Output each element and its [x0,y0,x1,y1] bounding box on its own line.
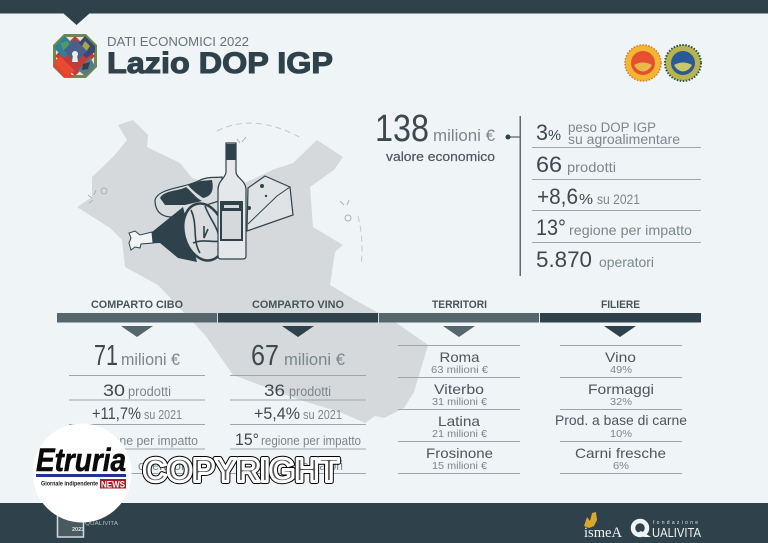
key figures list: 13° [536,215,566,240]
watermark: copyright: COPYRIGHT [143,452,339,488]
cheese [247,176,293,231]
panel: comparto vino: prodotti [289,384,331,399]
panel: filiere: 32% [610,396,632,408]
panel: territori: 21 milioni € [432,428,487,440]
ham hock [129,207,197,262]
panel: filiere [555,345,687,474]
panel: comparto cibo: milioni € [121,350,181,369]
logo: Ismea: ismeA [584,525,622,541]
panel: filiere: 10% [610,428,632,440]
panel: comparto vino: 67 [251,340,279,372]
logo: Fondazione Qualivita [633,520,702,540]
footer left mark: QUALIVITA [85,521,118,527]
panel: comparto cibo: prodotti [128,384,171,399]
panel: comparto cibo [69,340,205,474]
panel: comparto cibo: regione per impatto [92,433,198,448]
panel: comparto vino: +5,4% [254,404,300,423]
panel: filiere: Formaggi [588,381,654,397]
panel: comparto cibo: 71 [94,340,118,372]
column headers: COMPARTO VINO [252,299,344,311]
panel: territori: 31 milioni € [432,396,487,408]
watermark: copyright: COPYRIGHT [143,452,339,488]
main value: 138 milioni: milioni € [433,126,496,145]
panel: filiere: Prod. a base di carne [555,412,687,428]
subtitle: DATI ECONOMICI 2022 [107,34,249,49]
panel: territori: 15 milioni € [432,460,487,472]
key figures list: su 2021 [597,191,640,207]
bottle [218,143,246,259]
key figures list: 3 [536,120,548,145]
top bar [0,0,768,25]
key figures list: % [548,127,561,144]
panel: filiere: Vino [605,349,636,365]
key figures list: operatori [599,254,654,270]
icon: Lazio regional crest [53,34,97,78]
panel: comparto cibo: operatori [138,458,188,473]
panel: comparto vino: su 2021 [303,407,342,422]
key figures list: regione per impatto [569,222,692,238]
logo: Ismea [584,512,622,541]
key figures list: +8,6 [537,184,578,209]
panel: territori: Roma [440,349,480,365]
footer band [0,503,768,543]
key figures list: 5.870 [536,247,592,272]
main value: 138 milioni: valore economico [386,150,495,164]
watermark: Etruria News badge: Giornale indipendente [41,480,98,488]
panel: comparto cibo: +11,7% [92,404,141,423]
main value: 138 milioni: 138 [375,108,429,150]
column headers [91,299,640,311]
panel: filiere: 6% [613,460,629,472]
watermark: Etruria News badge: Etruria [36,442,126,478]
panel: comparto cibo: su 2021 [144,407,182,422]
logo: Fondazione Qualivita: fondazione [653,520,698,526]
connector line [506,116,521,276]
panel: filiere: Carni fresche [575,445,666,461]
panel: territori: Viterbo [434,381,484,397]
logo: Fondazione Qualivita: UALIVITA [652,526,702,540]
key figures list: 66 [536,152,562,177]
panel: comparto vino: 36 [264,381,285,400]
panel: territori [398,345,520,474]
panel: filiere: 49% [610,364,632,376]
steak [155,177,222,217]
column headers: TERRITORI [432,299,487,311]
icon: food products (ham, steak, wine, cheese) [129,143,293,265]
panel: territori: 63 milioni € [431,364,488,376]
footer left mark [58,515,118,537]
column bars and pointers [57,313,701,337]
map of Lazio [77,120,428,423]
panel: comparto vino [230,340,366,474]
key figures list: prodotti [567,159,616,175]
main value: 138 milioni [375,108,496,164]
footer left mark: 2023 [72,527,84,533]
panel: comparto vino: regione per impatto [261,433,361,448]
key figures list: % [579,191,593,208]
title: Lazio DOP IGP [107,47,333,80]
watermark: Etruria News badge: NEWS [101,480,125,490]
panel: comparto vino: 15° [235,430,259,449]
panel: comparto vino: operatori [295,458,343,473]
column headers: COMPARTO CIBO [91,299,183,311]
panel: territori: Latina [438,413,480,429]
panel: comparto vino: milioni € [284,350,346,369]
key figures list: peso DOP IGP [568,120,656,135]
key figures list: su agroalimentare [568,132,680,147]
key figures list [532,120,701,272]
panel: comparto cibo: 30 [103,381,125,400]
column headers: FILIERE [601,299,640,311]
watermark: Etruria News badge [32,424,132,522]
panel: territori: Frosinone [426,445,493,461]
icon: DOP and IGP seals [625,45,701,81]
